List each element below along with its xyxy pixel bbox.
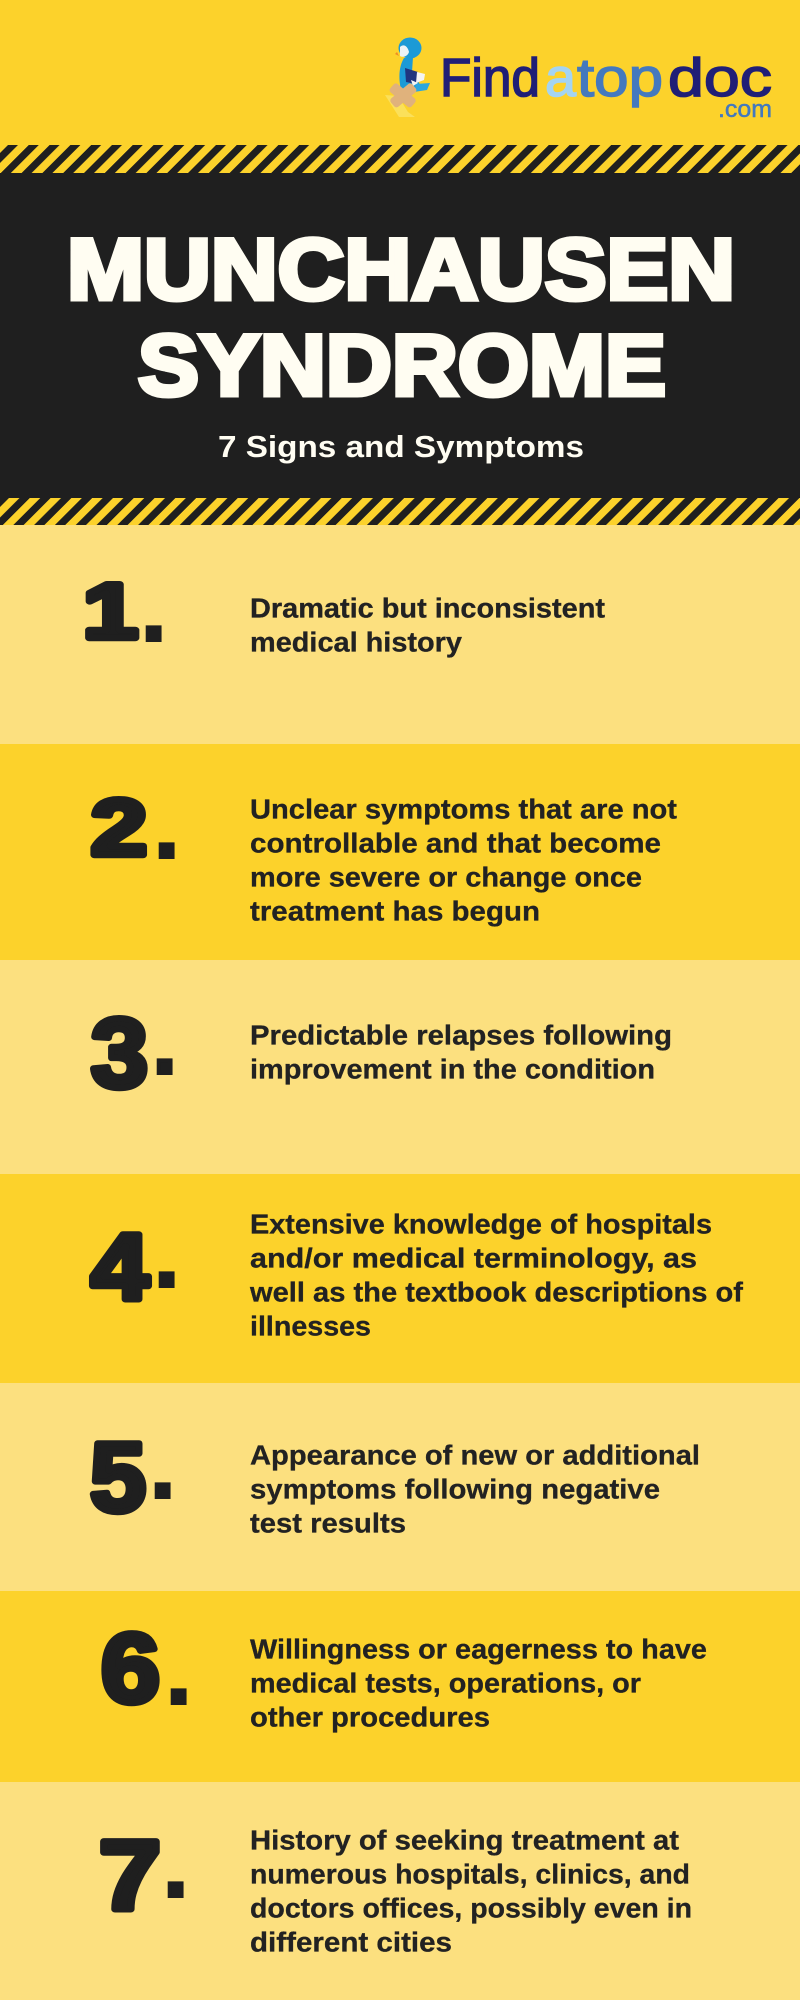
text: sign 5 [250, 1440, 700, 1538]
title panel [0, 173, 800, 498]
title: SYNDROME [138, 318, 666, 414]
text: sign 7: doctors offices, possibly even in [250, 1892, 692, 1924]
text: sign 7: numerous hospitals, clinics, and [250, 1858, 690, 1890]
text: sign 5: test results [250, 1508, 406, 1538]
text: sign 4: well as the textbook descriptions of [249, 1276, 744, 1308]
number 3 [91, 997, 176, 1108]
text: sign 3 [250, 1020, 672, 1084]
number 2 [91, 781, 178, 875]
text: sign 4: and/or medical terminology, as [250, 1242, 697, 1274]
number 7: 7 [99, 1820, 161, 1930]
text: sign 3: Predictable relapses following [250, 1020, 672, 1050]
text: sign 7: different cities [250, 1926, 452, 1958]
logo wordmark: doc [668, 48, 772, 108]
text: sign 1 [250, 592, 605, 658]
text: sign 7: History of seeking treatment at [250, 1824, 679, 1856]
hazard stripe: bottom [0, 498, 800, 525]
number 5 [90, 1421, 174, 1532]
number 3: . [153, 997, 176, 1091]
number 5: 5 [90, 1422, 146, 1532]
text: sign 2: controllable and that become [250, 828, 661, 858]
hazard stripe: top [0, 145, 800, 173]
number 6: . [167, 1627, 190, 1721]
number 2: . [155, 781, 178, 875]
logo wordmark: Find [440, 48, 540, 108]
panel: sign 1 [0, 525, 800, 744]
text: sign 1: Dramatic but inconsistent [250, 592, 605, 624]
text: sign 1: medical history [250, 626, 463, 658]
text: sign 5: Appearance of new or additional [250, 1440, 700, 1470]
text: sign 3: improvement in the condition [250, 1054, 655, 1084]
text: sign 6: other procedures [250, 1702, 490, 1732]
text: sign 2: more severe or change once [250, 862, 642, 892]
logo wordmark: a [545, 48, 577, 108]
text: sign 2: treatment has begun [250, 896, 540, 926]
number 7 [99, 1820, 187, 1930]
number 1: . [142, 564, 165, 658]
panel: sign 4 [0, 1174, 800, 1383]
text: sign 7 [250, 1824, 692, 1958]
panel: sign 2 [0, 744, 800, 960]
number 6: 6 [101, 1613, 160, 1723]
logo [385, 38, 772, 123]
subtitle: 7 Signs and Symptoms [218, 429, 584, 464]
title [67, 222, 735, 414]
number 4: 4 [91, 1214, 149, 1319]
panel: sign 7 [0, 1782, 800, 2000]
number 2: 2 [91, 783, 147, 872]
text: sign 2: Unclear symptoms that are not [250, 794, 677, 824]
icon: duck mascot with bandage [385, 38, 430, 117]
text: sign 4: illnesses [250, 1310, 371, 1342]
text: sign 5: symptoms following negative [250, 1474, 660, 1504]
panel: sign 5 [0, 1383, 800, 1591]
number 3: 3 [91, 998, 148, 1108]
logo wordmark [440, 48, 772, 123]
text: sign 4: Extensive knowledge of hospitals [250, 1208, 712, 1240]
number 6 [101, 1613, 190, 1723]
title: MUNCHAUSEN [67, 222, 735, 318]
number 7: . [164, 1820, 187, 1914]
number 1 [83, 564, 165, 658]
panel: sign 6 [0, 1591, 800, 1782]
number 4: . [155, 1210, 178, 1304]
header band [0, 0, 800, 145]
logo wordmark: .com [718, 96, 772, 123]
text: sign 6 [250, 1634, 707, 1732]
logo wordmark: top [577, 48, 663, 108]
panel: sign 3 [0, 960, 800, 1174]
text: sign 6: medical tests, operations, or [250, 1668, 641, 1698]
text: sign 2 [250, 794, 677, 926]
text: sign 4 [249, 1208, 744, 1342]
number 4 [91, 1210, 178, 1319]
number 1: 1 [83, 567, 138, 655]
text: sign 6: Willingness or eagerness to have [250, 1634, 707, 1664]
number 5: . [151, 1421, 174, 1515]
